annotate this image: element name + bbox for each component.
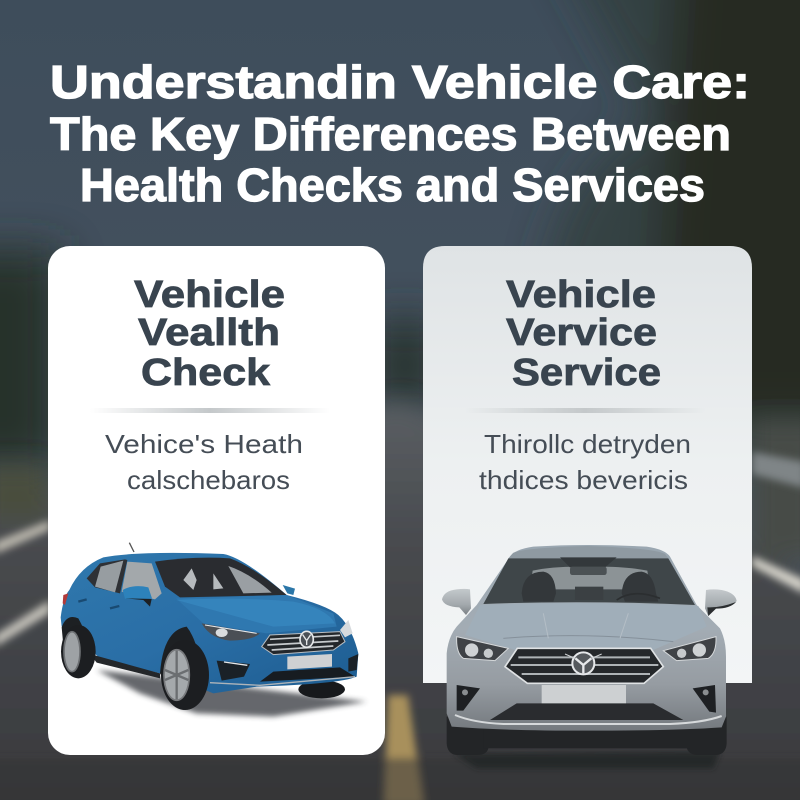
blue hatchback car <box>61 543 367 717</box>
panel description: calschebaros <box>127 465 290 495</box>
panel heading: Vehicle <box>506 274 656 316</box>
title <box>50 56 750 211</box>
panel heading <box>134 274 285 394</box>
panel heading: Vervice <box>506 312 657 354</box>
panel heading: Vehicle <box>134 274 285 316</box>
panel heading: Service <box>512 352 661 394</box>
panel description: Thirollc detryden <box>484 429 691 459</box>
title: Health Checks and Services <box>80 159 705 211</box>
panel description <box>479 429 691 495</box>
panel description: Vehice's Heath <box>105 429 303 459</box>
panel description <box>105 429 303 495</box>
silver sedan car <box>442 545 737 768</box>
panel heading <box>506 274 661 394</box>
panel heading: Check <box>141 352 271 394</box>
panel background <box>48 246 385 755</box>
title: Understandin Vehicle Care: <box>50 56 750 108</box>
panel: vehicle service <box>423 246 752 768</box>
title: The Key Differences Between <box>50 108 731 160</box>
panel: vehicle health check <box>48 246 385 755</box>
panel background <box>423 246 752 683</box>
panel description: thdices bevericis <box>479 465 688 495</box>
panel heading: Veallth <box>138 312 280 354</box>
